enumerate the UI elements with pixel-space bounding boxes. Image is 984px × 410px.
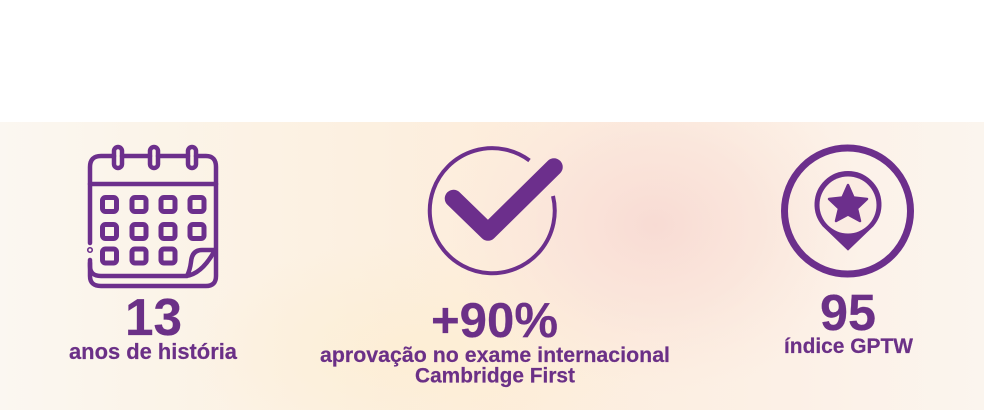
label: índice GPTW: índice GPTW bbox=[784, 334, 914, 358]
icon: calendar bbox=[89, 147, 216, 286]
background band bbox=[0, 122, 984, 410]
label: aprovação no exame internacional: aprovação no exame internacional bbox=[320, 343, 670, 367]
icon: check in circle bbox=[430, 148, 555, 273]
label: anos de história: anos de história bbox=[69, 339, 238, 364]
icon: star pin badge bbox=[784, 148, 910, 274]
label: Cambridge First: Cambridge First bbox=[415, 364, 575, 388]
panel: aprovação bbox=[320, 148, 670, 388]
number: 95: 95 bbox=[820, 284, 876, 341]
number: +90%: +90% bbox=[431, 294, 558, 348]
number: 13: 13 bbox=[125, 289, 182, 347]
panel: índice GPTW bbox=[784, 148, 914, 358]
panel: anos de história bbox=[69, 147, 238, 364]
